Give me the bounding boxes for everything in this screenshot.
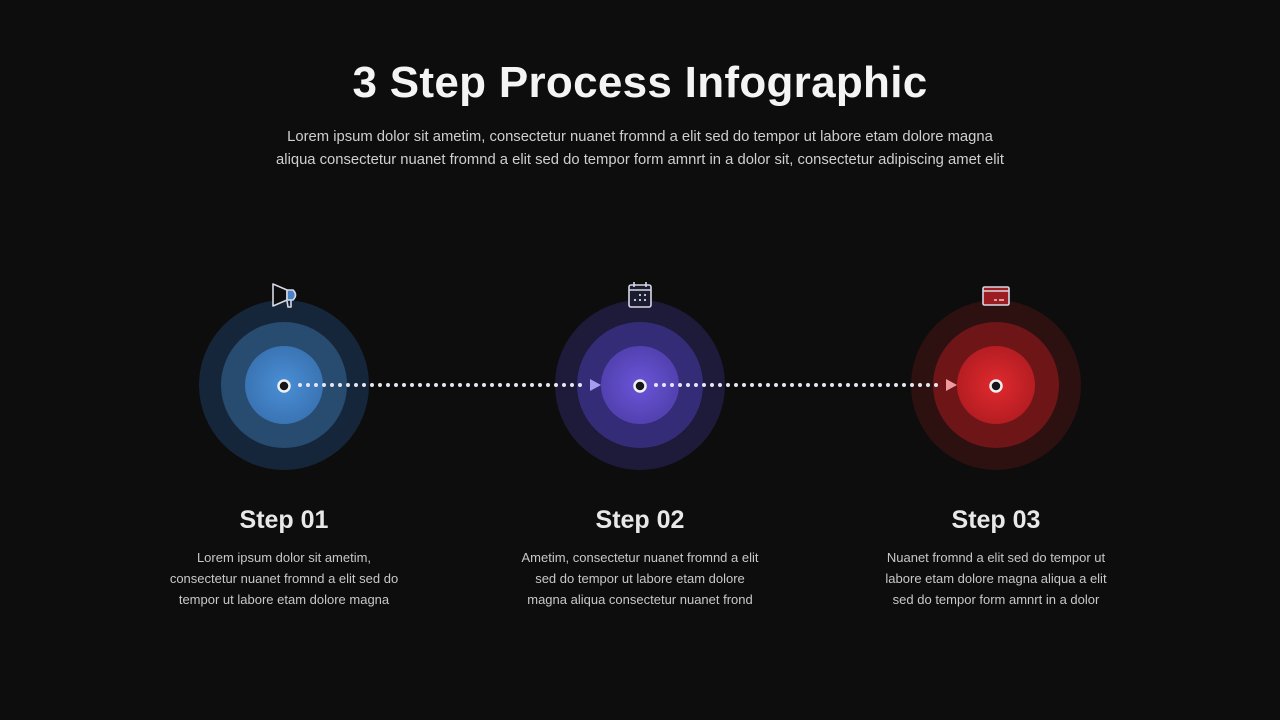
step 2 text: Ametim, consectetur nuanet fromnd a elit [521, 550, 758, 565]
step 1 text: consectetur nuanet fromnd a elit sed do [170, 571, 398, 586]
circle: step 1 [199, 300, 369, 470]
title: 3 Step Process Infographic [352, 58, 928, 107]
circle: step 3 [911, 300, 1081, 470]
step 1 text: tempor ut labore etam dolore magna [179, 592, 389, 607]
subtitle text: Lorem ipsum dolor sit ametim, consectetur nuanet fromnd a elit sed do tempor ut labore etam dolore magna [287, 129, 993, 145]
step 2 text [521, 506, 758, 607]
step 3 text [885, 506, 1107, 607]
arrow: step 2 to 3 [656, 379, 957, 391]
step 3 text: Step 03 [952, 506, 1040, 534]
arrow: step 1 to 2 [300, 379, 601, 391]
step 3 text: Nuanet fromnd a elit sed do tempor ut [887, 550, 1105, 565]
subtitle text: aliqua consectetur nuanet fromnd a elit sed do tempor form amnrt in a dolor sit, consectetur adipiscing amet elit [276, 152, 1004, 168]
step 2 text: magna aliqua consectetur nuanet frond [527, 592, 753, 607]
subtitle text [276, 129, 1004, 168]
icon: calendar [629, 282, 651, 307]
step 1 text [170, 506, 398, 607]
step 2 text: Step 02 [596, 506, 684, 534]
icon: credit card [983, 287, 1009, 305]
step 3 text: sed do tempor form amnrt in a dolor [893, 592, 1099, 607]
step 2 text: sed do tempor ut labore etam dolore [535, 571, 745, 586]
circle: step 2 [555, 300, 725, 470]
step 3 text: labore etam dolore magna aliqua a elit [885, 571, 1107, 586]
step 1 text: Step 01 [240, 506, 328, 534]
icon: megaphone [273, 284, 296, 307]
step 1 text: Lorem ipsum dolor sit ametim, [197, 550, 371, 565]
